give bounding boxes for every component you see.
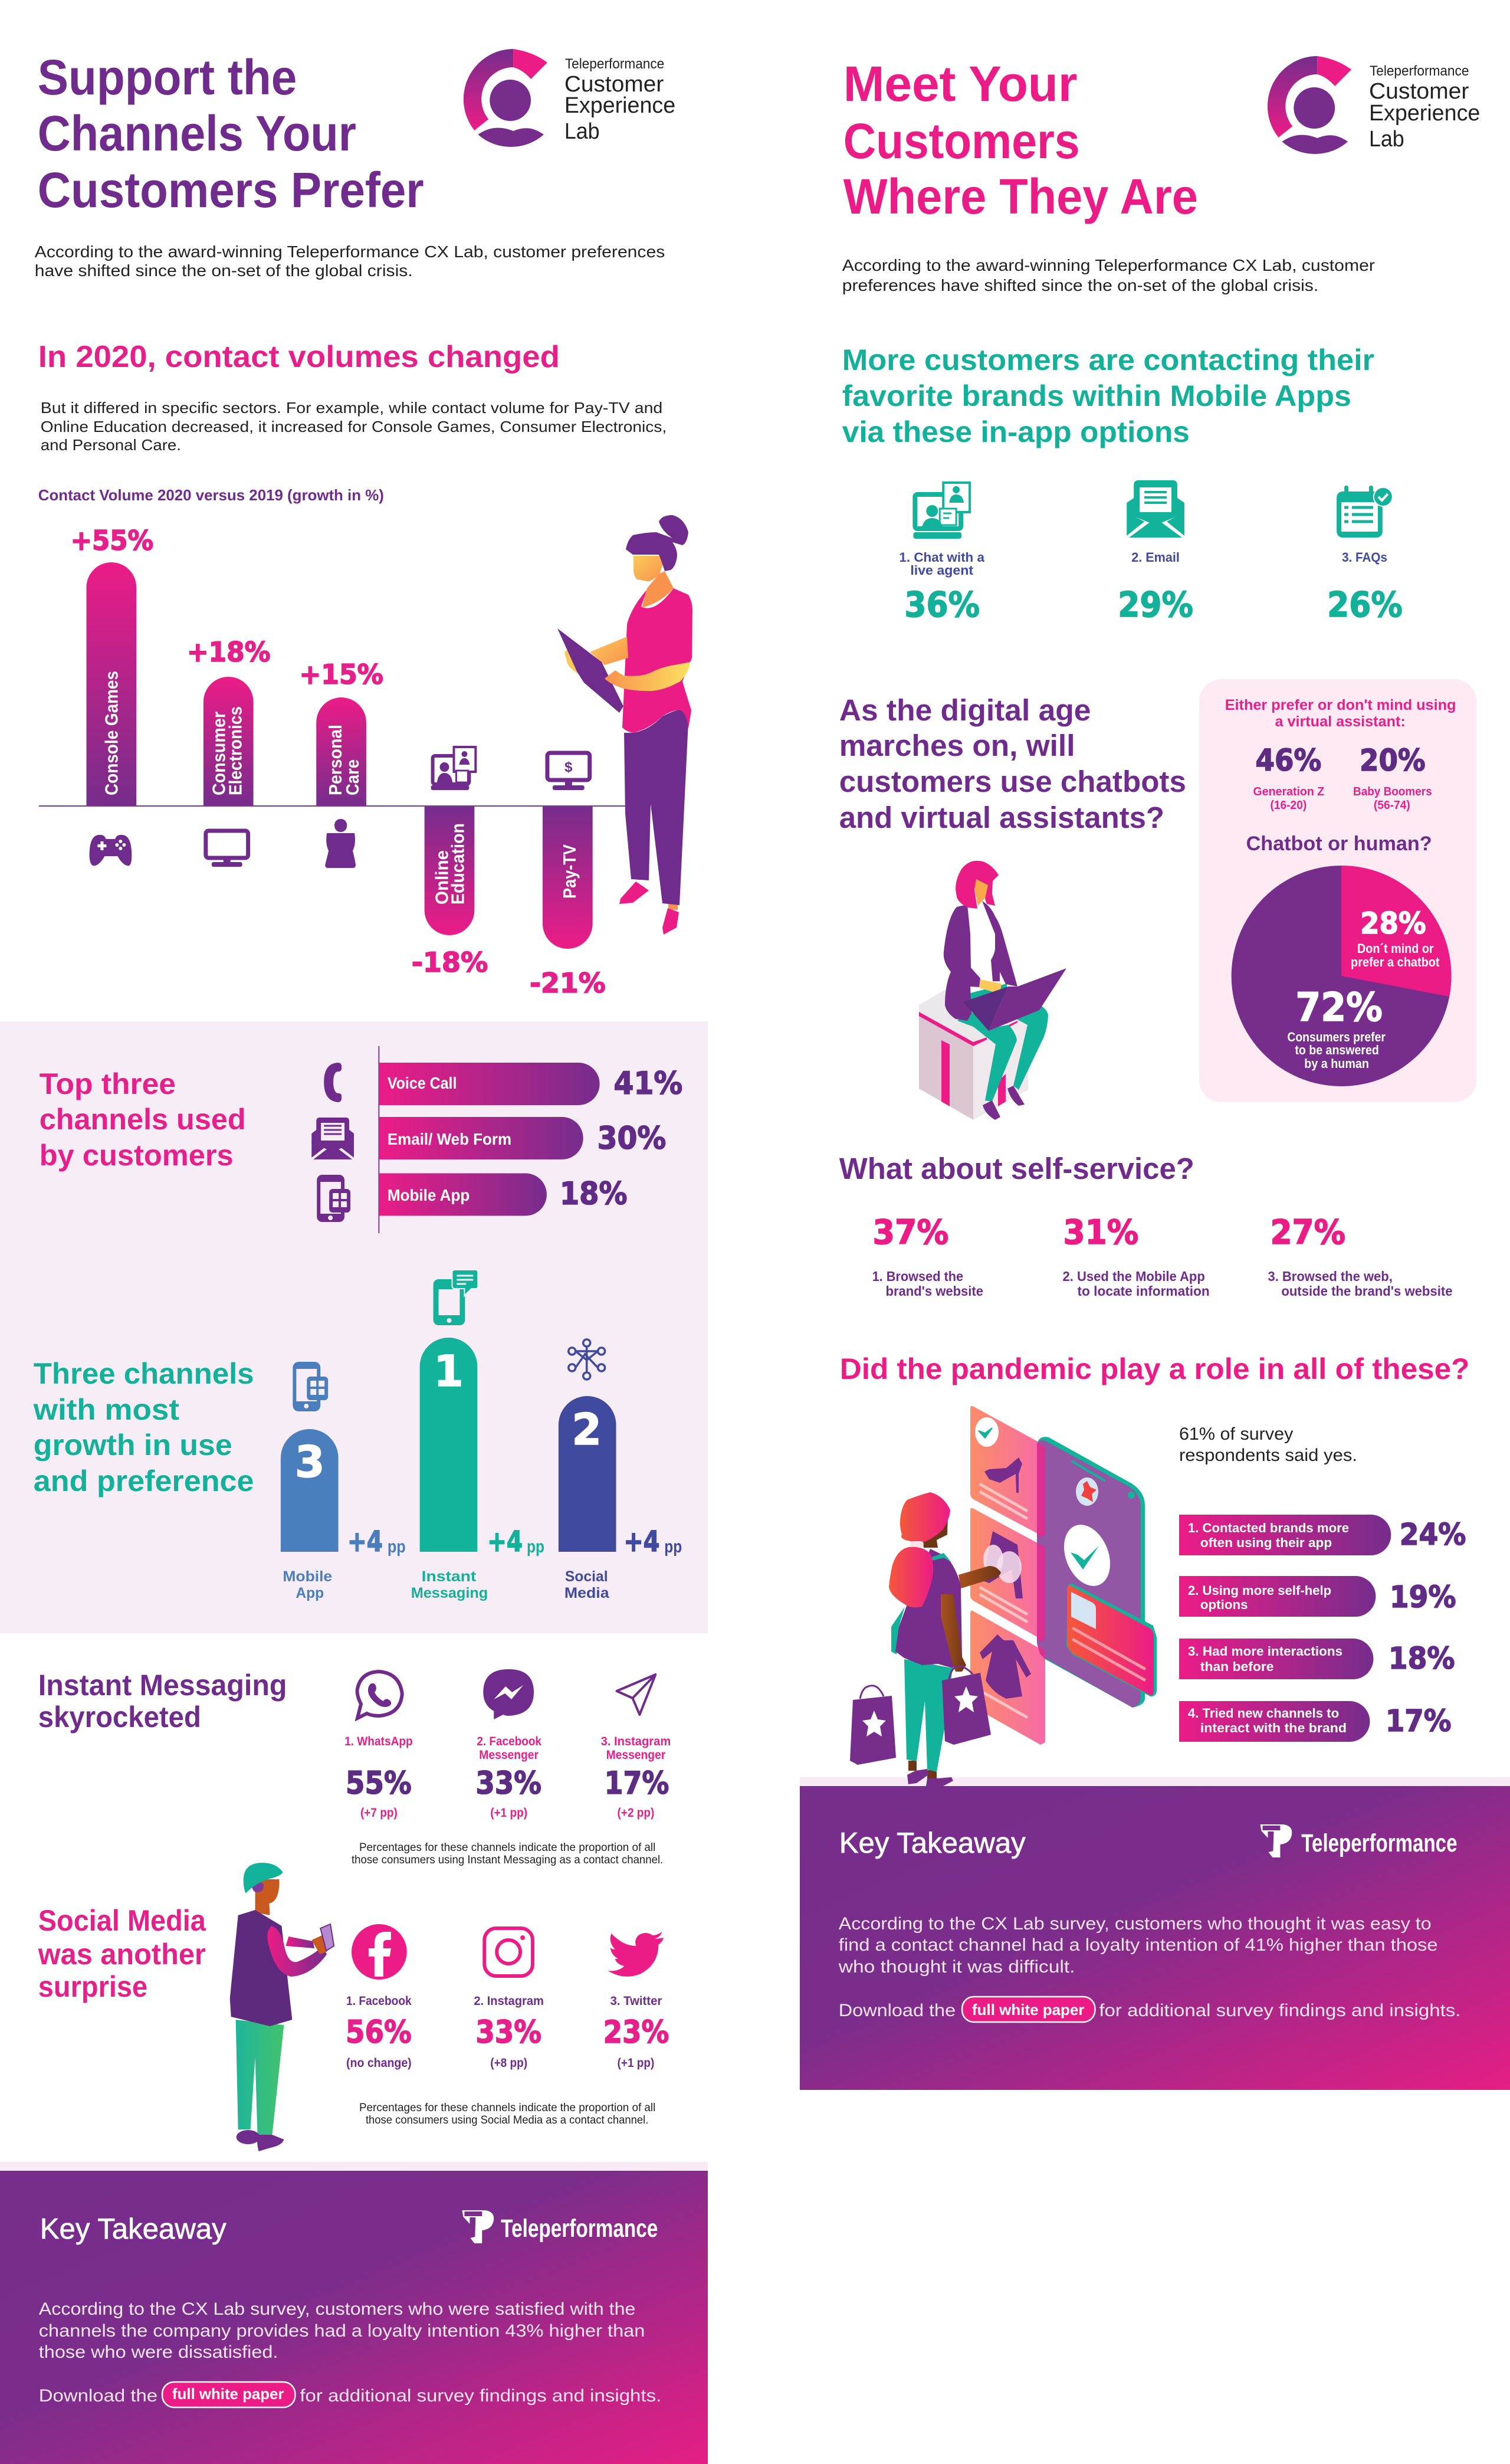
icon: pay-tv monitor: $ xyxy=(564,759,572,775)
stat: facebook xyxy=(346,1994,412,2070)
stat: instagram messenger xyxy=(601,1735,671,1820)
icon: mobile blue xyxy=(293,1362,328,1411)
bar: more interactions: 3. Had more interactions xyxy=(1188,1644,1342,1659)
stat: browsed brand website xyxy=(872,1213,983,1299)
stats: social media platforms xyxy=(346,1924,669,2126)
bar: mobile app: Mobile App xyxy=(388,1186,470,1204)
bar: social media rank 2: pp xyxy=(664,1537,682,1557)
panel: key takeaway right xyxy=(800,1777,1510,2090)
heading: social media: surprise xyxy=(38,1970,147,2003)
title: meet your customers xyxy=(843,56,1198,224)
bar: consumer electronics: +18% xyxy=(187,636,270,668)
body: key takeaway: who thought it was difficult. xyxy=(838,1957,1075,1977)
bar: online education: Online xyxy=(432,850,452,905)
icon: faq checklist xyxy=(1337,486,1393,538)
icon: facebook xyxy=(352,1924,407,1980)
bar: consumer electronics: Consumer xyxy=(209,712,229,795)
heading: three channels growth: Three channels xyxy=(34,1357,254,1390)
bar: contacted brands: 24% xyxy=(1400,1518,1466,1552)
download line with button: Download the xyxy=(39,2386,157,2406)
bar: mobile app xyxy=(379,1173,627,1215)
stat: browsed outside web: outside the brand's website xyxy=(1281,1283,1453,1299)
icon: twitter xyxy=(608,1932,664,1977)
stat: twitter: (+1 pp) xyxy=(618,2056,654,2070)
bar: mobile app rank 3: +4 xyxy=(347,1526,383,1558)
logo: customer experience lab right: Experience xyxy=(1369,101,1480,126)
title: support the channels xyxy=(38,50,424,218)
bar: console games: Console Games xyxy=(101,671,122,795)
bar: online education: -18% xyxy=(412,946,488,978)
bar: contacted brands: 1. Contacted brands more xyxy=(1188,1521,1349,1535)
download line with button: full white paper xyxy=(172,2386,284,2403)
body: key takeaway: According to the CX Lab survey, customers who were satisfied with the xyxy=(39,2299,635,2319)
note: social media: those consumers using Social Media as a contact channel. xyxy=(366,2114,648,2126)
stat: generation z: (16-20) xyxy=(1270,799,1307,812)
logo: teleperformance: Teleperformance xyxy=(1301,1829,1457,1857)
stat: facebook: 56% xyxy=(346,2014,412,2050)
illustration: man with phone xyxy=(230,1863,334,2151)
chart: pandemic behaviors xyxy=(1179,1515,1466,1742)
pie chart: chatbot or human: to be answered xyxy=(1295,1043,1379,1057)
bar: personal care: Care xyxy=(342,759,363,795)
stat: faqs xyxy=(1327,550,1403,625)
logo: customer experience lab right: Lab xyxy=(1369,127,1404,152)
stat: instagram: (+8 pp) xyxy=(490,2056,527,2070)
bar: mobile app rank 3 xyxy=(281,1429,406,1601)
stat: browsed brand website: 37% xyxy=(873,1213,948,1252)
text: virtual assistant heading: Either prefer or don't mind using xyxy=(1225,697,1456,713)
body: key takeaway xyxy=(838,1914,1438,1977)
icon: paper plane xyxy=(617,1675,655,1715)
heading: contact volumes: In 2020, contact volumes changed xyxy=(38,340,560,374)
logo: customer experience lab right: Teleperformance xyxy=(1370,63,1469,79)
title: meet your customers: Customers xyxy=(843,113,1079,169)
intro text right xyxy=(842,256,1375,294)
note: instant messaging: Percentages for these channels indicate the proportion of all xyxy=(359,1842,655,1854)
bar: social media rank 2: Social xyxy=(565,1568,608,1585)
stat: whatsapp xyxy=(344,1735,413,1820)
note: social media: Percentages for these channels indicate the proportion of all xyxy=(359,2102,655,2114)
download line with button: Download the xyxy=(839,2001,956,2020)
heading: key takeaway: Key Takeaway xyxy=(40,2213,226,2245)
note: instant messaging: those consumers using Instant Messaging as a contact channel. xyxy=(352,1854,663,1866)
bar: voice call: Voice Call xyxy=(388,1074,457,1092)
body text: sectors xyxy=(41,400,667,454)
stat: mobile app info: 31% xyxy=(1063,1213,1138,1252)
bar: email: Email/ Web Form xyxy=(388,1130,511,1148)
shopping bags xyxy=(942,1673,991,1745)
logo: teleperformance xyxy=(1260,1824,1457,1857)
bar: pay-tv: Pay-TV xyxy=(559,844,580,899)
heading: three channels growth xyxy=(33,1357,254,1498)
icon: mobile app xyxy=(317,1175,350,1222)
bar: new channels: 4. Tried new channels to xyxy=(1188,1706,1339,1721)
stat: browsed brand website: brand's website xyxy=(885,1283,983,1299)
bar: new channels xyxy=(1179,1701,1452,1742)
bar: contacted brands xyxy=(1179,1515,1466,1555)
pie chart: chatbot or human: 72% xyxy=(1295,984,1383,1030)
tile contents xyxy=(975,1417,999,1447)
text: virtual assistant heading: a virtual assistant: xyxy=(1275,713,1406,730)
icon: messenger xyxy=(483,1669,534,1719)
stat: instagram: 33% xyxy=(475,2014,541,2050)
bar: personal care xyxy=(299,658,383,805)
logo: customer experience lab right: Customer xyxy=(1369,79,1469,104)
bar: social media rank 2: +4 xyxy=(623,1526,659,1558)
download line with button xyxy=(39,2382,661,2407)
bar: personal care: Personal xyxy=(325,725,346,795)
stat: facebook messenger: 33% xyxy=(475,1765,541,1801)
intro text left: According to the award-winning Teleperformance CX Lab, customer preferences xyxy=(35,243,665,261)
download line with button: full white paper xyxy=(972,2002,1084,2019)
bar: self-help xyxy=(1179,1576,1456,1617)
woman xyxy=(908,1761,937,1781)
text: survey statement: 61% of survey xyxy=(1179,1424,1293,1444)
icon: bottle xyxy=(325,819,356,868)
bar: self-help: 19% xyxy=(1390,1580,1456,1615)
bar: social media rank 2: Media xyxy=(564,1585,610,1601)
stat: whatsapp: (+7 pp) xyxy=(360,1806,398,1820)
stat: browsed outside web: 3. Browsed the web, xyxy=(1268,1269,1393,1284)
bar: mobile app rank 3: Mobile xyxy=(283,1568,332,1585)
heading: mobile apps xyxy=(842,343,1374,448)
stat: whatsapp: 1. WhatsApp xyxy=(344,1735,413,1748)
heading: chatbots xyxy=(839,693,1186,834)
stat: facebook messenger: (+1 pp) xyxy=(490,1806,527,1820)
bar: instant messaging rank 1 xyxy=(411,1338,544,1601)
title: support the channels: Channels Your xyxy=(38,106,356,161)
bar: online education xyxy=(412,807,488,978)
illustration: woman shopping with phone interface xyxy=(850,1406,1157,1786)
heading: social media: Social Media xyxy=(38,1904,206,1937)
download line with button xyxy=(839,1997,1460,2022)
heading: three channels growth: and preference xyxy=(34,1464,254,1498)
intro text right: preferences have shifted since the on-set of the global crisis. xyxy=(842,276,1318,294)
pie chart: chatbot or human: by a human xyxy=(1304,1056,1369,1071)
body: key takeaway: According to the CX Lab survey, customers who thought it was easy to xyxy=(839,1914,1432,1934)
stat: mobile app info: 2. Used the Mobile App xyxy=(1063,1269,1205,1284)
body: key takeaway: find a contact channel had a loyalty intention of 41% higher than those xyxy=(839,1935,1438,1955)
icon: whatsapp xyxy=(357,1672,402,1718)
stat: twitter xyxy=(603,1994,669,2070)
stat: mobile app info: to locate information xyxy=(1077,1283,1210,1299)
stat: email: 2. Email xyxy=(1131,550,1180,565)
intro text right: According to the award-winning Teleperformance CX Lab, customer xyxy=(842,256,1375,274)
illustration: woman with tablet xyxy=(557,515,692,935)
heading: chatbots: and virtual assistants? xyxy=(839,801,1164,834)
pie chart: chatbot or human: Consumers prefer xyxy=(1287,1030,1386,1044)
text: survey statement xyxy=(1179,1424,1357,1465)
bar: social media rank 2 xyxy=(559,1396,682,1601)
bar: self-help: 2. Using more self-help xyxy=(1188,1583,1331,1598)
bar: pay-tv xyxy=(530,807,606,999)
bar: consumer electronics xyxy=(187,636,270,805)
stat: chat: 36% xyxy=(904,584,980,625)
stat: instagram: 2. Instagram xyxy=(474,1994,544,2008)
bar: pay-tv: -21% xyxy=(530,967,606,999)
title: meet your customers: Meet Your xyxy=(843,56,1077,112)
bar: consumer electronics: Electronics xyxy=(225,706,246,795)
text: survey statement: respondents said yes. xyxy=(1179,1446,1357,1465)
bar: mobile app rank 3: App xyxy=(296,1585,324,1601)
panel: key takeaway left xyxy=(0,2162,708,2464)
heading: instant messaging: skyrocketed xyxy=(38,1700,201,1734)
icon: email xyxy=(1127,480,1184,538)
bar: console games: +55% xyxy=(71,525,153,556)
stat: twitter: 3. Twitter xyxy=(610,1994,662,2008)
stat: email: 29% xyxy=(1118,584,1193,625)
heading: instant messaging xyxy=(38,1669,287,1734)
chart: growth channels xyxy=(281,1270,682,1601)
bar: more interactions: 18% xyxy=(1388,1641,1455,1676)
stat: faqs: 3. FAQs xyxy=(1342,550,1387,565)
download line with button: for additional survey findings and insights. xyxy=(300,2386,661,2406)
heading: self-service: What about self-service? xyxy=(839,1152,1194,1185)
stat: facebook messenger xyxy=(475,1735,541,1820)
bar chart: contact volume xyxy=(39,525,626,999)
bar: instant messaging rank 1: Messaging xyxy=(411,1585,488,1601)
heading: pandemic: Did the pandemic play a role in all of these? xyxy=(840,1352,1469,1385)
stat: whatsapp: 55% xyxy=(346,1765,412,1801)
chart title: Contact Volume 2020 versus 2019 (growth in %) xyxy=(38,487,384,504)
icon: live agent chat xyxy=(913,483,970,539)
stat: instagram messenger: 17% xyxy=(605,1765,669,1801)
logo: customer experience lab right xyxy=(1268,56,1480,154)
stat: mobile app info xyxy=(1063,1213,1210,1299)
bar: voice call: 41% xyxy=(614,1066,682,1102)
icon: game controller xyxy=(89,835,132,866)
stat: instagram messenger: 3. Instagram xyxy=(601,1735,671,1748)
bar: email: 30% xyxy=(598,1120,666,1156)
bar: mobile app: 18% xyxy=(560,1176,627,1212)
intro text left: have shifted since the on-set of the global crisis. xyxy=(35,261,413,280)
stat: chat xyxy=(899,550,985,625)
bar: new channels: interact with the brand xyxy=(1200,1721,1347,1735)
icon: social network xyxy=(569,1339,605,1380)
stat: facebook: 1. Facebook xyxy=(346,1994,412,2008)
bar: mobile app rank 3: pp xyxy=(388,1537,406,1557)
note: instant messaging xyxy=(352,1842,663,1866)
heading: chatbots: customers use chatbots xyxy=(839,765,1186,798)
stat: faqs: 26% xyxy=(1327,584,1403,625)
logo: customer experience lab left: Experience xyxy=(564,93,675,118)
phone back xyxy=(1037,1437,1145,1708)
bar: mobile app rank 3: 3 xyxy=(295,1437,325,1487)
heading: instant messaging: Instant Messaging xyxy=(38,1669,287,1702)
stat: facebook messenger: Messenger xyxy=(479,1748,539,1762)
right infographic column xyxy=(800,56,1510,2090)
bar: voice call xyxy=(379,1063,682,1105)
panel: virtual assistant preference xyxy=(1199,679,1476,1102)
heading: top three channels xyxy=(40,1067,246,1172)
heading: mobile apps: More customers are contacting their xyxy=(842,343,1374,376)
bar: self-help: options xyxy=(1200,1597,1248,1612)
bar: online education: Education xyxy=(447,823,468,905)
logo: teleperformance xyxy=(462,2210,658,2243)
left infographic column xyxy=(0,49,708,2464)
stat: chat: 1. Chat with a xyxy=(899,550,985,565)
stat: generation z xyxy=(1253,743,1324,812)
title: support the channels: Customers Prefer xyxy=(38,162,424,218)
icon: online education xyxy=(431,747,475,790)
bar: instant messaging rank 1: +4 xyxy=(487,1526,523,1558)
heading: chatbots: As the digital age xyxy=(839,693,1091,727)
title: support the channels: Support the xyxy=(38,50,297,105)
logo: customer experience lab left: Lab xyxy=(564,119,600,144)
stat: email xyxy=(1118,550,1193,625)
heading: mobile apps: favorite brands within Mobile Apps xyxy=(842,379,1351,412)
heading: three channels growth: with most xyxy=(33,1393,179,1426)
text: virtual assistant heading xyxy=(1225,697,1456,730)
pie chart: chatbot or human: Don´t mind or xyxy=(1357,941,1434,956)
pie chart: chatbot or human: 28% xyxy=(1360,906,1426,941)
heading: social media: was another xyxy=(38,1938,206,1971)
logo: customer experience lab left: Teleperformance xyxy=(565,56,664,72)
heading: key takeaway: Key Takeaway xyxy=(839,1827,1026,1859)
body: key takeaway: those who were dissatisfied. xyxy=(39,2342,278,2362)
download line with button: for additional survey findings and insights. xyxy=(1099,2001,1460,2020)
icon: instant messaging phone xyxy=(434,1270,478,1325)
bar: more interactions: than before xyxy=(1200,1659,1273,1674)
bar: instant messaging rank 1: pp xyxy=(527,1537,544,1557)
stat: instagram xyxy=(474,1994,544,2070)
icon: pay-tv monitor xyxy=(547,753,590,790)
heading: social media xyxy=(38,1904,206,2003)
note: social media xyxy=(359,2102,655,2126)
icon: phone xyxy=(324,1063,342,1102)
stat: generation z: 46% xyxy=(1256,743,1321,778)
body text: sectors: Online Education decreased, it increased for Console Games, Consumer Electronics, xyxy=(41,419,667,435)
stat: chat: live agent xyxy=(910,563,974,578)
stats: self-service xyxy=(872,1213,1453,1299)
bar: instant messaging rank 1: 1 xyxy=(434,1346,464,1397)
logo: customer experience lab left xyxy=(464,49,675,147)
body text: sectors: and Personal Care. xyxy=(41,437,181,454)
stat: instagram messenger: (+2 pp) xyxy=(618,1806,654,1820)
icon: envelope xyxy=(311,1118,354,1159)
stat: browsed brand website: 1. Browsed the xyxy=(872,1269,963,1284)
phone front xyxy=(1037,1440,1141,1708)
tile overlap strips xyxy=(1037,1443,1045,1641)
stat: baby boomers: Baby Boomers xyxy=(1353,785,1432,798)
stat: instagram messenger: Messenger xyxy=(606,1748,665,1762)
heading: chatbots: marches on, will xyxy=(839,729,1075,762)
heading: three channels growth: growth in use xyxy=(34,1428,232,1462)
intro text left xyxy=(35,243,665,280)
body text: sectors: But it differed in specific sectors. For example, while contact volume for Pay-TV and xyxy=(41,400,662,417)
stats: in-app options xyxy=(899,480,1403,625)
illustration: woman on box with laptop xyxy=(919,861,1066,1120)
icon: instagram xyxy=(484,1928,533,1976)
stat: facebook: (no change) xyxy=(346,2056,412,2070)
stat: browsed outside web xyxy=(1268,1213,1453,1299)
heading: top three channels: by customers xyxy=(40,1139,234,1172)
light section background: channels xyxy=(0,1021,708,1633)
stat: baby boomers: 20% xyxy=(1360,743,1426,778)
bar: email xyxy=(379,1117,666,1159)
body: key takeaway xyxy=(39,2299,645,2362)
bar: console games xyxy=(71,525,153,805)
title: meet your customers: Where They Are xyxy=(843,169,1198,224)
icon: monitor xyxy=(206,831,248,867)
heading: top three channels: Top three xyxy=(40,1067,176,1100)
chart: top three channels xyxy=(311,1046,682,1233)
bar: new channels: 17% xyxy=(1386,1704,1452,1739)
stat: baby boomers xyxy=(1353,743,1432,812)
logo: teleperformance: Teleperformance xyxy=(501,2214,658,2243)
pie chart: chatbot or human xyxy=(1232,866,1452,1086)
heading: mobile apps: via these in-app options xyxy=(842,415,1190,448)
bar: more interactions xyxy=(1179,1639,1455,1679)
bar: contacted brands: often using their app xyxy=(1200,1535,1332,1550)
logo: customer experience lab left: Customer xyxy=(564,72,664,97)
bar: social media rank 2: 2 xyxy=(572,1405,602,1455)
stat: browsed outside web: 27% xyxy=(1270,1213,1345,1252)
body: key takeaway: channels the company provides had a loyalty intention 43% higher than xyxy=(39,2321,645,2341)
tiles xyxy=(970,1406,1045,1538)
stat: baby boomers: (56-74) xyxy=(1374,799,1410,812)
stat: twitter: 23% xyxy=(603,2014,669,2050)
pie chart: chatbot or human: prefer a chatbot xyxy=(1351,955,1440,969)
bar: instant messaging rank 1: Instant xyxy=(422,1568,476,1585)
stat: facebook messenger: 2. Facebook xyxy=(477,1735,541,1748)
bar: personal care: +15% xyxy=(299,658,383,690)
stats: instant messaging apps xyxy=(344,1669,671,1866)
heading: chatbot or human: Chatbot or human? xyxy=(1246,833,1432,855)
stat: generation z: Generation Z xyxy=(1253,785,1324,798)
heading: top three channels: channels used xyxy=(40,1103,246,1136)
